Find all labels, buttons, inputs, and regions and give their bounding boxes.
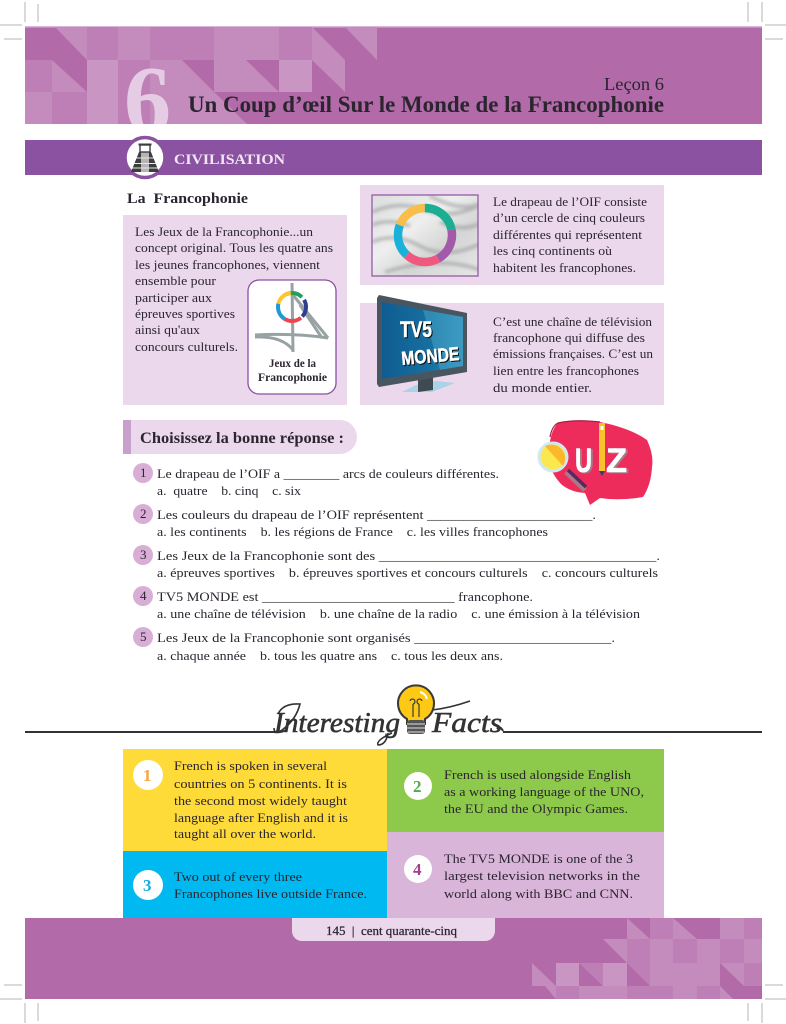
- panel: jeux de la francophonie: épreuves sportives: [135, 306, 235, 321]
- panel: drapeau de l'OIF: différentes qui représentent: [493, 227, 642, 242]
- fact 2: 2: [413, 777, 422, 796]
- question 3: 3: [140, 547, 146, 562]
- fact 3: [123, 851, 387, 918]
- question 3: a. épreuves sportives b. épreuves sportives et concours culturels c. concours culturels: [157, 565, 658, 580]
- question 5: Les Jeux de la Francophonie sont organisés ___________________________.: [157, 630, 615, 645]
- panel: TV5 Monde: C’est une chaîne de télévision: [493, 314, 653, 329]
- question 4: [133, 586, 641, 621]
- page number tab: 145 | cent quarante-cinq: [326, 924, 458, 938]
- panel: drapeau de l'OIF: Le drapeau de l’OIF consiste: [493, 194, 647, 209]
- question 3: Les Jeux de la Francophonie sont des ______________________________________.: [157, 548, 660, 563]
- question 2: 2: [140, 506, 146, 521]
- page number tab: [292, 918, 495, 941]
- fact 2: as a working language of the UNO,: [444, 784, 644, 799]
- panel: drapeau de l'OIF: habitent les francophones.: [493, 260, 636, 275]
- image: TV5 Monde television: MONDE: [401, 344, 460, 370]
- question 3: [133, 545, 660, 580]
- icon: quiz bubble: U: [575, 442, 592, 480]
- fact 4: [387, 832, 664, 918]
- fact 1: countries on 5 continents. It is: [174, 776, 347, 791]
- heading: interesting facts: Interesting: [273, 707, 400, 739]
- heading: La Francophonie: La Francophonie: [127, 191, 248, 207]
- question 4: 4: [140, 588, 147, 603]
- panel: jeux de la francophonie: participer aux: [135, 290, 213, 305]
- panel: jeux de la francophonie: ainsi qu'aux: [135, 322, 201, 337]
- card: jeux logo: Jeux de la: [269, 358, 316, 370]
- heading: interesting facts: Facts: [431, 707, 502, 739]
- fact 3: 3: [143, 876, 152, 895]
- panel: jeux de la francophonie: les jeunes francophones, viennent: [135, 257, 320, 272]
- panel: TV5 Monde: lien entre les francophones: [493, 363, 639, 378]
- question 2: Les couleurs du drapeau de l’OIF représentent _______________________.: [157, 507, 596, 522]
- icon: quiz bubble: [539, 421, 652, 505]
- fact 4: largest television networks in the: [444, 868, 640, 883]
- panel: jeux de la francophonie: Les Jeux de la Francophonie...un: [135, 224, 314, 239]
- panel: jeux de la francophonie: [123, 215, 347, 405]
- panel: TV5 Monde: francophone qui diffuse des: [493, 330, 645, 345]
- lesson label: Leçon 6: [604, 74, 664, 94]
- panel: TV5 Monde: émissions françaises. C’est un: [493, 346, 653, 361]
- icon: pyramid badge: [125, 138, 165, 178]
- question 2: a. les continents b. les régions de France c. les villes francophones: [157, 524, 548, 539]
- fact 2: French is used alongside English: [444, 767, 632, 782]
- heading: quiz instruction: Choisissez la bonne réponse :: [140, 430, 344, 447]
- question 1: Le drapeau de l’OIF a ________ arcs de couleurs différentes.: [157, 466, 499, 481]
- image: TV5 Monde television: TV5: [400, 317, 432, 342]
- section band: civilisation: [25, 140, 762, 175]
- question 2: [133, 504, 596, 539]
- panel: drapeau de l'OIF: d’un cercle de cinq couleurs: [493, 210, 645, 225]
- fact 2: [387, 749, 664, 832]
- heading: interesting facts: [25, 685, 762, 745]
- fact 4: world along with BBC and CNN.: [444, 886, 633, 901]
- fact 4: 4: [413, 860, 422, 879]
- fact 1: the second most widely taught: [174, 793, 347, 808]
- card: jeux logo: [248, 280, 336, 394]
- panel: jeux de la francophonie: concours culturels.: [135, 339, 238, 354]
- panel: jeux de la francophonie: ensemble pour: [135, 273, 217, 288]
- image: OIF flag: [372, 195, 480, 276]
- icon: quiz bubble: Z: [606, 442, 627, 480]
- question 5: 5: [140, 629, 146, 644]
- image: TV5 Monde television: [377, 295, 467, 392]
- lesson number: 6: [124, 47, 171, 155]
- panel: drapeau de l'OIF: [360, 185, 664, 285]
- lesson title: Un Coup d’œil Sur le Monde de la Francophonie: [188, 92, 664, 117]
- question 1: a. quatre b. cinq c. six: [157, 483, 302, 498]
- fact 2: the EU and the Olympic Games.: [444, 801, 628, 816]
- section band: civilisation: CIVILISATION: [174, 152, 285, 168]
- fact 3: Francophones live outside France.: [174, 886, 367, 901]
- fact 1: French is spoken in several: [174, 758, 327, 773]
- fact 4: The TV5 MONDE is one of the 3: [444, 851, 633, 866]
- icon: light bulb: [398, 685, 434, 734]
- heading: quiz instruction: [123, 420, 357, 454]
- footer band: [25, 918, 762, 999]
- question 1: [133, 463, 499, 498]
- fact 3: Two out of every three: [174, 869, 302, 884]
- fact 1: [123, 749, 387, 851]
- fact 1: 1: [143, 766, 152, 785]
- panel: drapeau de l'OIF: les cinq continents où: [493, 243, 613, 258]
- question 4: TV5 MONDE est ___________________________ francophone.: [157, 589, 533, 604]
- question 5: [133, 627, 615, 663]
- fact 1: taught all over the world.: [174, 826, 316, 841]
- question 5: a. chaque année b. tous les quatre ans c. tous les deux ans.: [157, 648, 503, 663]
- panel: TV5 Monde: [360, 295, 664, 405]
- question 4: a. une chaîne de télévision b. une chaîne de la radio c. une émission à la télévision: [157, 606, 641, 621]
- question 1: 1: [140, 465, 146, 480]
- fact 1: language after English and it is: [174, 810, 348, 825]
- panel: TV5 Monde: du monde entier.: [493, 380, 592, 395]
- panel: jeux de la francophonie: concept original. Tous les quatre ans: [135, 240, 333, 255]
- header band: [25, 26, 762, 124]
- card: jeux logo: Francophonie: [258, 372, 327, 384]
